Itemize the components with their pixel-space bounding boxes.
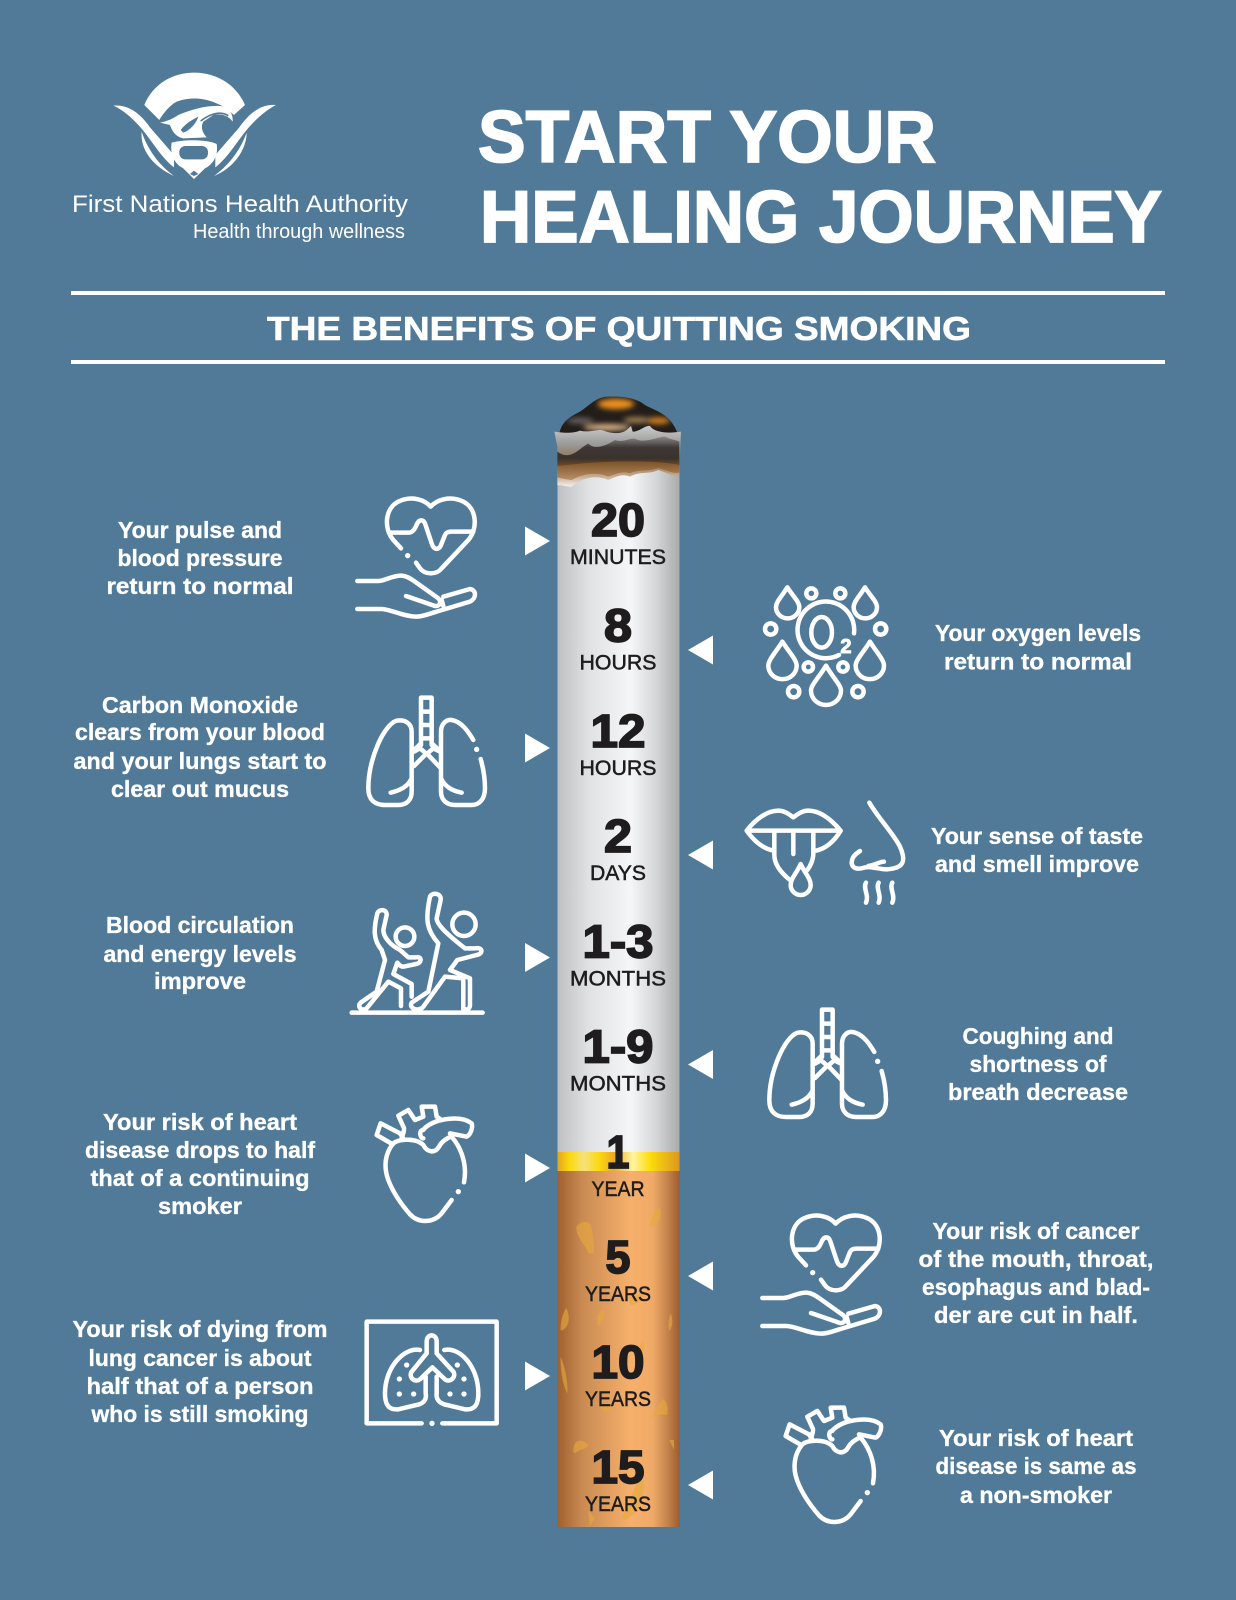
text: half that of a person [86,1373,314,1399]
text: Coughing and [962,1023,1114,1049]
text: clear out mucus [111,776,289,802]
icon: lung x-ray [367,1322,497,1426]
time marker: 1 year: 1 [606,1126,630,1178]
text [936,1425,1136,1508]
cigarette filter [558,1171,680,1527]
time marker: 5 years: 5 [606,1231,630,1283]
text [74,692,326,802]
time marker: 5 years [585,1231,651,1306]
gold band [558,1152,680,1171]
text: disease is same as [936,1453,1136,1479]
arrow [688,840,713,870]
icon: mouth and nose [747,803,903,903]
time marker: 1-9 months: MONTHS [570,1072,666,1096]
time marker: 8 hours [580,600,656,674]
text: clears from your blood [75,719,325,745]
time marker: 8 hours: HOURS [580,652,656,674]
text: smoker [158,1193,242,1219]
text: a non-smoker [960,1482,1112,1508]
text: der are cut in half. [934,1302,1138,1328]
text: blood pressure [118,545,282,571]
icon: heart [377,1107,472,1221]
text: and smell improve [935,851,1139,877]
time marker: 1-3 months [570,916,666,990]
arrow [525,1154,550,1182]
time marker: 2 days: DAYS [590,862,646,885]
text: and your lungs start to [74,748,326,774]
arrow [525,1362,550,1390]
benefit: heart disease same as non-smoker [688,1408,1136,1522]
time marker: 15 years: YEARS [585,1493,651,1516]
time marker: 5 years: YEARS [585,1283,651,1306]
text: improve [154,968,246,994]
time marker: 1-3 months: MONTHS [570,968,666,990]
time marker: 10 years: YEARS [585,1388,651,1411]
icon: lungs [769,1010,886,1117]
subtitle band: THE BENEFITS OF QUITTING SMOKING [267,310,971,347]
arrow [525,734,550,762]
text: Your risk of heart [939,1425,1133,1451]
time marker: 8 hours: 8 [604,600,632,652]
icon: heart [786,1408,881,1522]
cigarette timeline [554,393,681,1527]
time marker: 12 hours: HOURS [580,757,656,780]
text: shortness of [970,1051,1107,1077]
icon: heart in hand [762,1216,880,1334]
text: who is still smoking [91,1401,308,1427]
title [478,97,1162,258]
benefit: taste and smell [688,803,1143,903]
benefit: heart disease risk drops [85,1107,550,1221]
text: Your pulse and [118,517,282,543]
text: that of a continuing [90,1165,310,1191]
icon: lungs [368,698,485,805]
text: of the mouth, throat, [918,1246,1154,1272]
cigarette paper [558,440,680,1152]
logo name: First Nations Health Authority [72,191,408,218]
logo emblem [113,73,276,179]
text [72,1316,328,1427]
text: Blood circulation [106,912,294,938]
text [935,620,1141,674]
time marker: 1 year: YEAR [592,1178,644,1201]
benefit: circulation and energy [104,894,550,1013]
text [931,823,1143,877]
arrow [688,1470,713,1500]
benefit: cancer risk cut in half [688,1216,1154,1334]
time marker: 12 hours [580,705,656,780]
text: esophagus and blad- [922,1274,1150,1300]
benefit: coughing and shortness of breath [688,1010,1128,1117]
icon: two active people [352,894,483,1013]
text: Your sense of taste [931,823,1143,849]
text: Your risk of cancer [932,1218,1140,1244]
title: HEALING JOURNEY [480,177,1162,258]
icon: oxygen and drops: 2 [840,636,852,658]
text [85,1109,315,1219]
text [948,1023,1128,1105]
arrow [688,636,713,664]
time marker: 20 minutes: 20 [591,494,645,546]
arrow [525,943,550,972]
benefit: carbon monoxide [74,692,550,805]
time marker: 10 years [585,1336,651,1411]
logo tagline: Health through wellness [193,221,405,243]
text: return to normal [944,648,1132,674]
time marker: 10 years: 10 [592,1336,644,1388]
text: Carbon Monoxide [102,692,298,718]
benefit: pulse and blood pressure [106,499,550,617]
text: return to normal [106,573,294,599]
text [104,912,296,994]
text: disease drops to half [85,1137,315,1163]
subtitle band [71,291,1165,364]
time marker: 15 years [585,1441,651,1516]
time marker: 20 minutes [570,494,666,569]
icon: heart in hand [357,499,475,617]
text: Your risk of dying from [72,1316,328,1342]
arrow [525,526,550,556]
burnt tip [554,393,681,487]
time marker: 20 minutes: MINUTES [570,546,666,569]
time marker: 1-3 months: 1-3 [582,916,654,968]
time marker: 2 days [590,810,646,885]
time marker: 1-9 months [570,1020,666,1096]
time marker: 1-9 months: 1-9 [582,1020,654,1072]
benefit: lung cancer risk [72,1316,550,1427]
text: breath decrease [948,1079,1128,1105]
text: Your oxygen levels [935,620,1141,646]
text: and energy levels [104,941,296,967]
icon: oxygen and drops [765,587,886,705]
text [918,1218,1154,1328]
time marker: 1 year [592,1126,644,1201]
text [106,517,294,599]
time marker: 15 years: 15 [592,1441,644,1493]
logo: First Nations Health Authority [72,73,408,243]
arrow [688,1050,713,1079]
time marker: 12 hours: 12 [590,705,646,757]
text: Your risk of heart [103,1109,297,1135]
time marker: 2 days: 2 [604,810,632,862]
arrow [688,1262,713,1290]
benefit: oxygen levels [688,587,1141,705]
title: START YOUR [478,97,936,178]
text: lung cancer is about [88,1345,312,1371]
